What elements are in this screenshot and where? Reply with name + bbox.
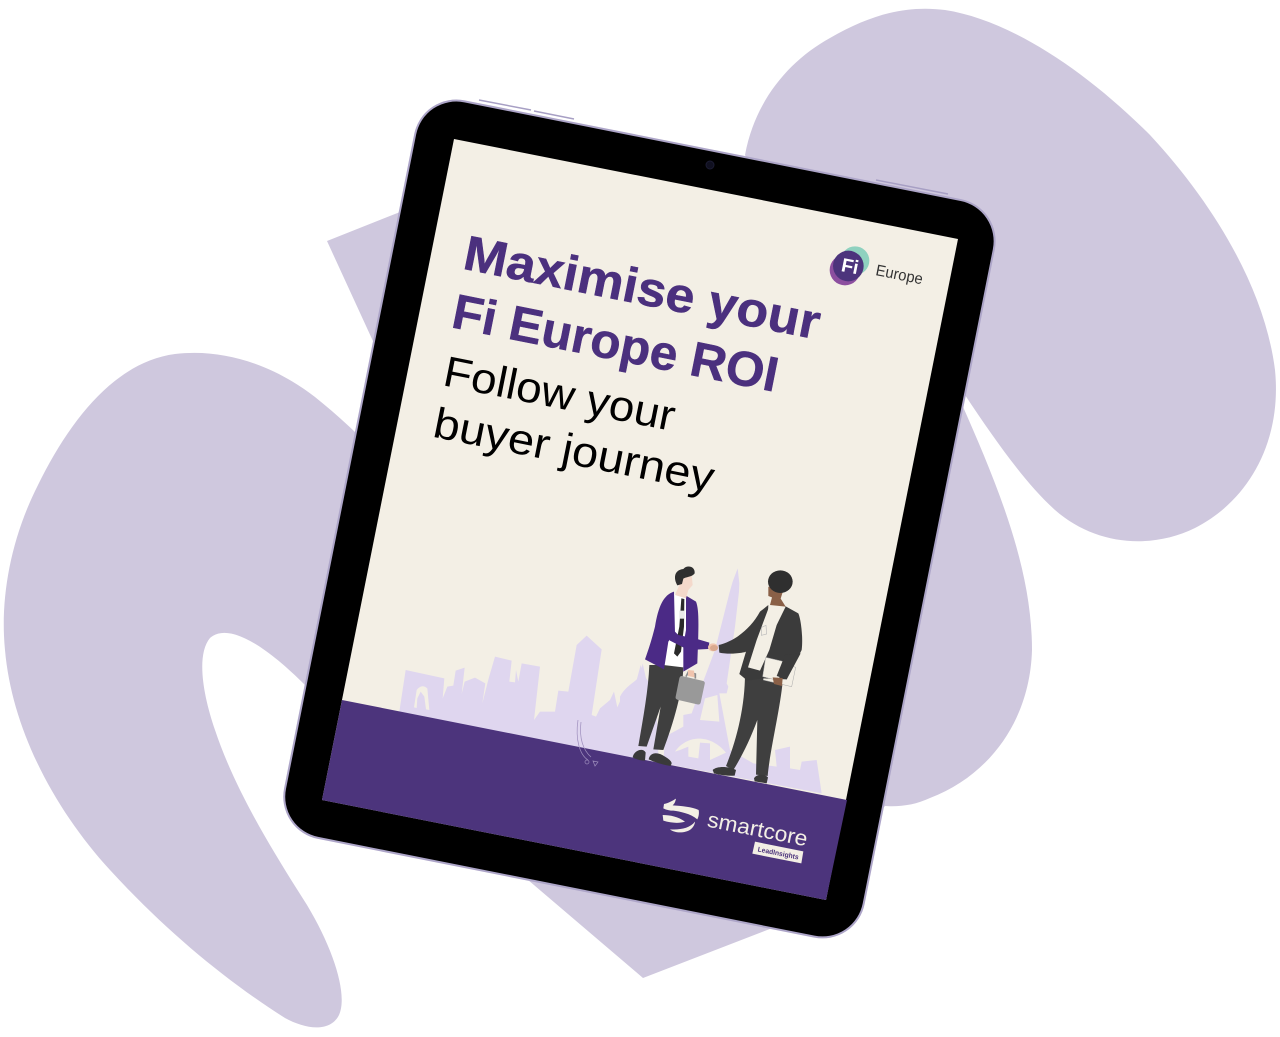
footer band <box>322 700 847 900</box>
person left <box>633 566 718 766</box>
trousers <box>638 665 683 750</box>
background shape: centre <box>327 212 1032 978</box>
small band marks <box>577 720 598 766</box>
subheading: Follow your <box>440 348 679 441</box>
Fi Europe logo: Fi <box>839 255 860 279</box>
lanyard badge <box>679 611 685 619</box>
trousers <box>726 673 783 776</box>
hand <box>708 643 718 651</box>
background blob: right <box>745 9 1276 541</box>
shoes <box>633 750 672 766</box>
hair <box>768 570 793 593</box>
briefcase <box>676 670 705 704</box>
subheading: buyer journey <box>430 399 719 502</box>
head <box>675 575 693 598</box>
LeadInsights badge <box>752 842 803 863</box>
document <box>763 657 796 687</box>
forearm and hand <box>777 653 801 679</box>
white shirt <box>663 593 688 667</box>
tablet body <box>277 93 1002 945</box>
tablet camera <box>706 161 714 169</box>
hair <box>675 566 695 585</box>
subheading <box>430 348 719 502</box>
skyline illustration <box>399 568 822 793</box>
document front <box>763 657 783 681</box>
heading: Fi Europe ROI <box>448 285 783 403</box>
logo mark <box>663 799 699 832</box>
shoes <box>713 767 768 783</box>
background blob: left <box>4 353 420 1027</box>
LeadInsights badge: LeadInsights <box>757 846 799 861</box>
dome <box>620 663 658 757</box>
Fi Europe logo: Europe <box>874 262 925 288</box>
white t-shirt <box>748 606 786 671</box>
Eiffel tower <box>663 568 822 793</box>
tie <box>674 598 684 657</box>
Smartcore logo <box>663 799 810 863</box>
Fi Europe logo <box>830 246 925 288</box>
jacket <box>719 605 802 681</box>
tablet side buttons <box>479 100 948 194</box>
tablet <box>277 93 1002 945</box>
person right <box>710 570 802 783</box>
heading: Maximise your <box>459 226 825 350</box>
wordmark: smartcore <box>705 807 810 851</box>
head <box>768 587 786 607</box>
handshake illustration <box>633 566 802 783</box>
heading <box>448 226 825 403</box>
jacket <box>645 592 709 672</box>
shirt badge <box>761 625 767 635</box>
tablet screen <box>322 139 958 900</box>
